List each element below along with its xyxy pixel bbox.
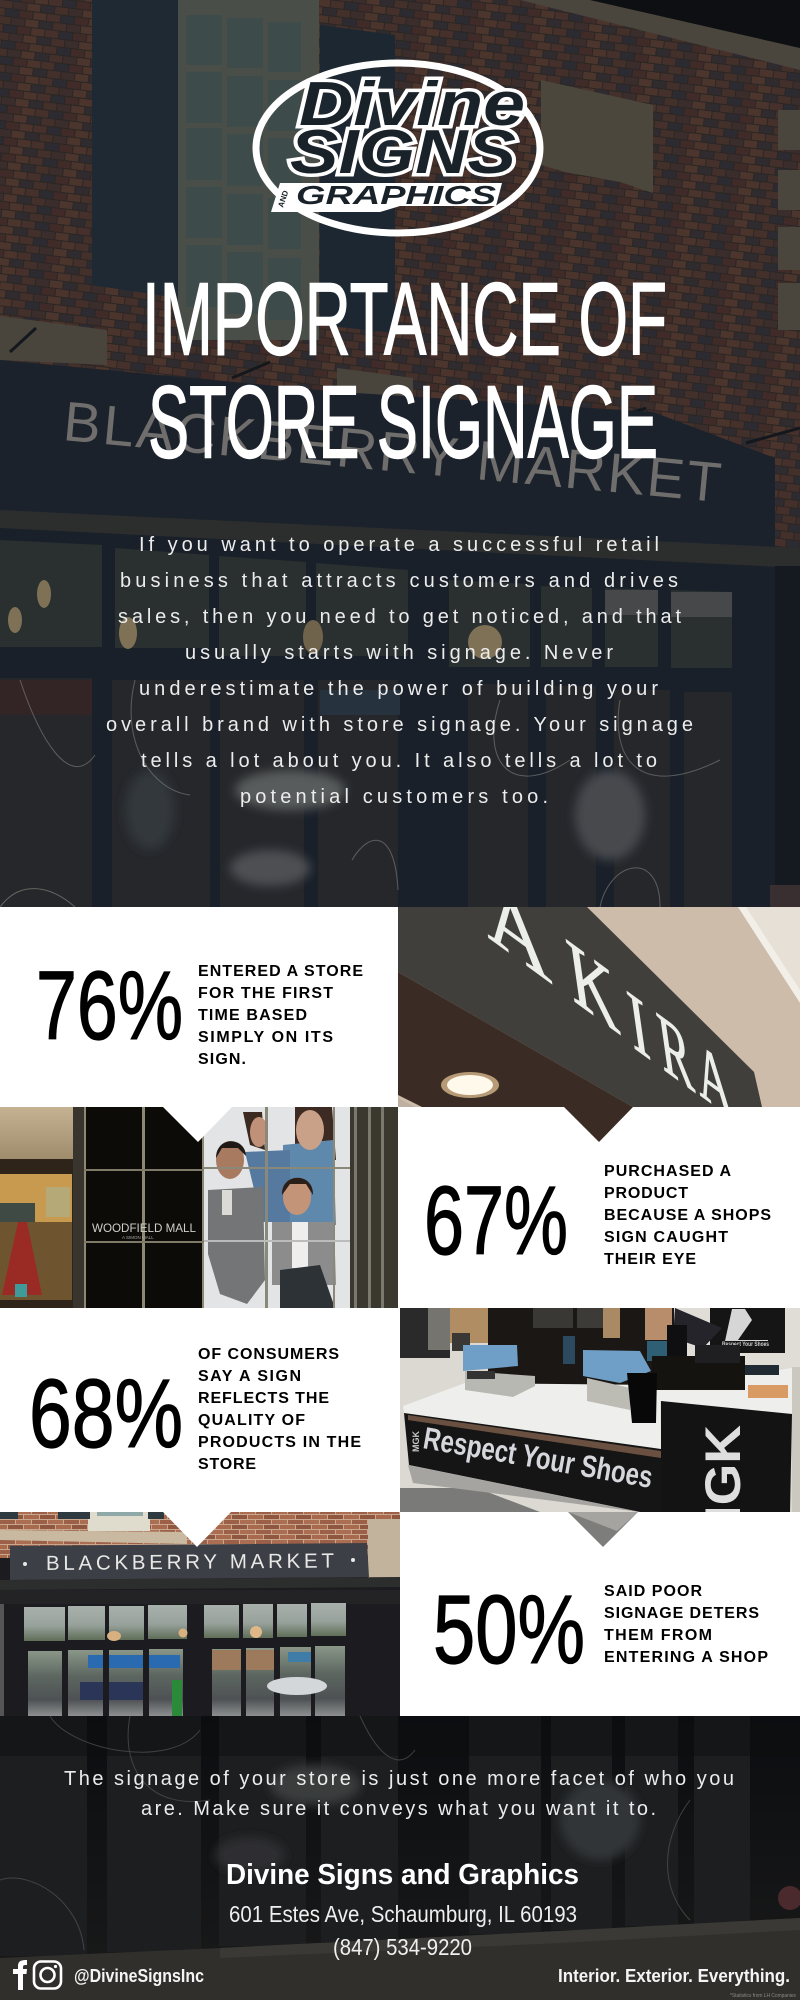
panel: 68% statistic: STORE [198,1456,256,1473]
intro paragraph: tells a lot about you. It also tells a lot to [141,750,657,772]
panel: 50% statistic: 50% [433,1575,585,1684]
photo: Blackberry Market storefront: BLACKBERRY MARKET [46,1549,335,1575]
photo: Woodfield Mall [0,1107,400,1308]
intro paragraph: overall brand with store signage. Your signage [106,714,693,736]
logo: Divine Signs and Graphics: AND [276,189,290,209]
panel: 67% statistic: PURCHASED A [604,1163,731,1180]
panel: 50% statistic: SAID POOR [604,1583,702,1600]
panel: 67% statistic: PRODUCT [604,1185,688,1202]
photo: MGK Respect Your Shoes kiosk: MGK [411,1431,421,1452]
photo: Akira sign: K [561,917,624,1056]
photo: Blackberry Market storefront [0,1512,400,1716]
panel: 68% statistic [0,1308,400,1512]
intro paragraph: potential customers too. [240,786,548,808]
social handle: @DivineSignsInc [74,1966,204,1986]
photo: Akira sign: I [622,970,655,1080]
photo: Akira sign: A [689,1020,738,1139]
company contact block [226,1859,579,1960]
panel: 50% statistic: THEM FROM [604,1627,712,1644]
logo: Divine Signs and Graphics [256,63,540,233]
company contact block: Divine Signs and Graphics [226,1859,579,1891]
photo: Woodfield Mall: WOODFIELD MALL [92,1221,196,1235]
panel: 68% statistic: SAY A SIGN [198,1368,301,1385]
intro paragraph [106,534,693,808]
panel: 67% statistic: THEIR EYE [604,1251,696,1268]
panel: 76% statistic: ENTERED A STORE [198,963,363,980]
intro paragraph: underestimate the power of building your [139,678,658,700]
panel: 50% statistic: SIGNAGE DETERS [604,1605,759,1622]
icon: facebook [13,1960,27,1990]
photo: Akira sign: R [652,993,699,1113]
logo: Divine Signs and Graphics: GRAPHICS [296,180,497,210]
panel: 76% statistic: TIME BASED [198,1007,307,1024]
panel: 67% statistic: 67% [424,1166,568,1275]
panel: 50% statistic [400,1512,800,1716]
intro paragraph: If you want to operate a successful retail [139,534,659,556]
logo: Divine Signs and Graphics: SIGNS [290,118,516,187]
closing statement: The signage of your store is just one more facet of who you [64,1768,734,1790]
photo: Akira sign: A [477,857,555,1003]
panel: 67% statistic [398,1107,800,1308]
panel: 76% statistic: 76% [36,951,183,1060]
panel: 67% statistic: SIGN CAUGHT [604,1229,728,1246]
panel: 76% statistic [0,907,398,1107]
footer background photo [0,1716,800,2000]
tagline: Interior. Exterior. Everything. [558,1966,790,1986]
closing statement [64,1768,734,1820]
logo: Divine Signs and Graphics: Divine [299,70,525,139]
panel: 68% statistic: REFLECTS THE [198,1390,329,1407]
photo: MGK Respect Your Shoes kiosk [400,1308,800,1512]
company contact block: 601 Estes Ave, Schaumburg, IL 60193 [229,1901,577,1927]
photo: Akira sign [398,907,800,1107]
panel: 76% statistic: SIMPLY ON ITS [198,1029,333,1046]
photo: MGK Respect Your Shoes kiosk: Respect Your Shoes [421,1420,655,1495]
panel: 68% statistic: QUALITY OF [198,1412,305,1429]
photo: MGK Respect Your Shoes kiosk: MGK [695,1425,751,1550]
company contact block: (847) 534-9220 [333,1934,472,1960]
intro paragraph: sales, then you need to get noticed, and that [118,606,681,628]
panel: 76% statistic: SIGN. [198,1051,246,1068]
panel: 67% statistic: BECAUSE A SHOPS [604,1207,771,1224]
intro paragraph: usually starts with signage. Never [185,642,613,664]
panel: 50% statistic: ENTERING A SHOP [604,1649,768,1666]
hero background photo: brick storefront: BLACKBERRY MARKET [61,389,724,514]
intro paragraph: business that attracts customers and drives [120,570,678,592]
icon: instagram [34,1962,61,1988]
photo: MGK Respect Your Shoes kiosk: Respect Your Shoes [722,1342,770,1348]
panel: 68% statistic: PRODUCTS IN THE [198,1434,361,1451]
panel: 76% statistic: FOR THE FIRST [198,985,333,1002]
hero background photo: brick storefront [0,0,800,910]
panel: 68% statistic: OF CONSUMERS [198,1346,339,1363]
photo: Woodfield Mall: A SIMON MALL [122,1235,154,1240]
title [142,262,667,480]
panel: 68% statistic: 68% [29,1359,183,1468]
closing statement: are. Make sure it conveys what you want it to. [141,1798,656,1820]
